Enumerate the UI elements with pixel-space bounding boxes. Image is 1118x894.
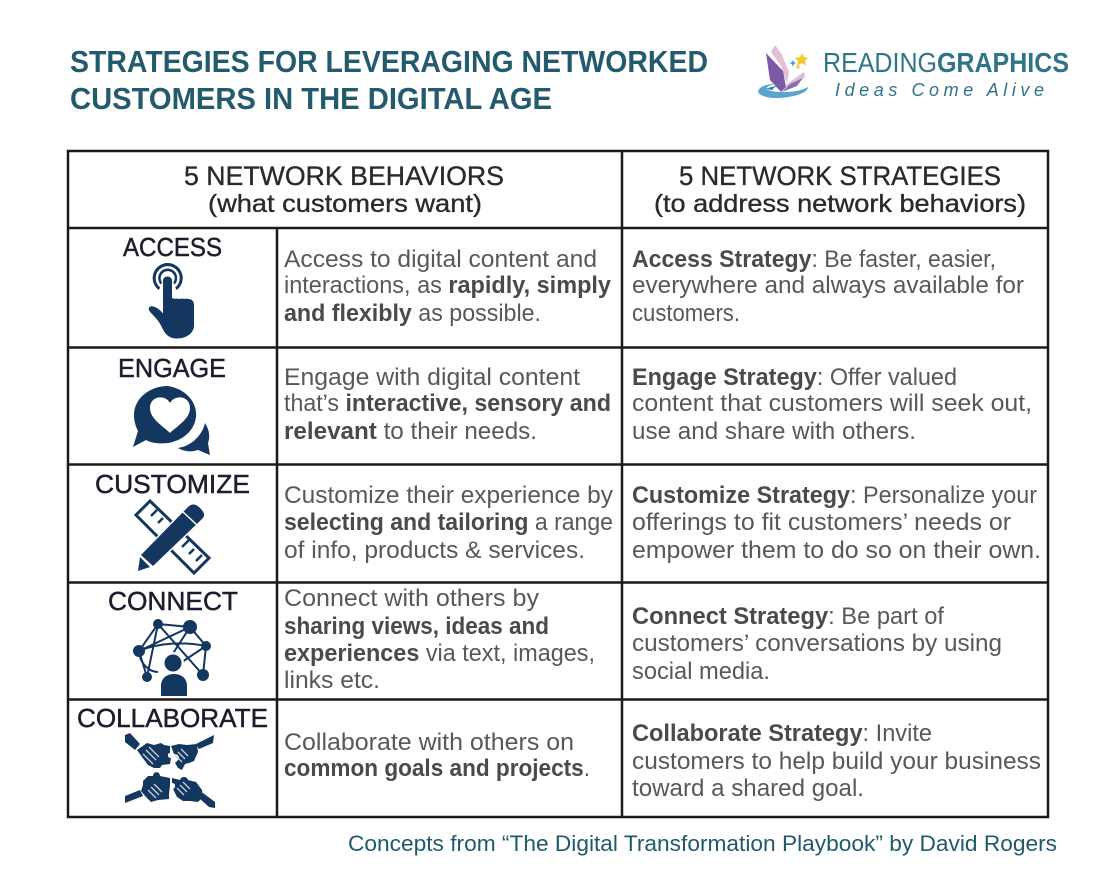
column heading: 5 network strategies: (to address network behaviors) bbox=[654, 190, 1026, 218]
icon: ruler and pencil bbox=[136, 501, 209, 573]
strategy text: offerings to fit customers’ needs or bbox=[632, 509, 1011, 536]
strategy text bbox=[632, 482, 1041, 564]
behavior text: links etc. bbox=[284, 667, 380, 694]
behavior text: selecting and tailoring a range bbox=[284, 509, 613, 536]
behavior text: common goals and projects. bbox=[284, 755, 590, 782]
icon: hands joining puzzle pieces bbox=[125, 733, 215, 808]
title: STRATEGIES FOR LEVERAGING NETWORKED bbox=[70, 44, 708, 79]
table grid bbox=[68, 151, 1048, 817]
title bbox=[70, 44, 708, 116]
strategy text: Access Strategy: Be faster, easier, bbox=[632, 246, 996, 273]
column heading: 5 network behaviors bbox=[184, 161, 504, 218]
strategy text: Connect Strategy: Be part of bbox=[632, 603, 944, 630]
strategy text bbox=[632, 603, 1002, 685]
strategy text: toward a shared goal. bbox=[632, 775, 864, 802]
behavior text bbox=[284, 585, 595, 694]
behavior text: Collaborate with others on bbox=[284, 729, 574, 756]
behavior text bbox=[284, 729, 590, 782]
label: access: ACCESS bbox=[123, 232, 222, 262]
strategy text: Customize Strategy: Personalize your bbox=[632, 482, 1037, 509]
row: collaborate bbox=[77, 703, 1041, 808]
behavior text bbox=[284, 364, 611, 445]
icon: speech bubbles with heart bbox=[133, 386, 210, 455]
behavior text: Customize their experience by bbox=[284, 482, 613, 509]
strategy text: customers’ conversations by using bbox=[632, 630, 1002, 657]
label: collaborate: COLLABORATE bbox=[77, 703, 268, 733]
strategy text: Engage Strategy: Offer valued bbox=[632, 364, 957, 391]
wordmark: READINGGRAPHICS bbox=[823, 47, 1069, 78]
strategy text bbox=[632, 246, 1024, 327]
logo: ReadingGraphics bbox=[758, 45, 1069, 100]
behavior text: interactions, as rapidly, simply bbox=[284, 272, 612, 299]
row: engage bbox=[118, 353, 1032, 455]
strategy text: customers. bbox=[632, 300, 740, 327]
strategy text: customers to help build your business bbox=[632, 748, 1041, 775]
column heading: 5 network behaviors: 5 NETWORK BEHAVIORS bbox=[184, 161, 504, 191]
strategy text: content that customers will seek out, bbox=[632, 390, 1032, 417]
behavior text: relevant to their needs. bbox=[284, 418, 537, 445]
row: customize bbox=[95, 469, 1041, 573]
behavior text: experiences via text, images, bbox=[284, 640, 595, 667]
behavior text: and flexibly as possible. bbox=[284, 300, 541, 327]
strategy text bbox=[632, 720, 1041, 802]
icon: open book with stars bbox=[758, 45, 808, 98]
label: customize: CUSTOMIZE bbox=[95, 469, 250, 499]
behavior text: sharing views, ideas and bbox=[284, 613, 549, 640]
row: access bbox=[123, 232, 1024, 338]
column heading: 5 network behaviors: (what customers want) bbox=[208, 190, 482, 218]
behavior text bbox=[284, 246, 612, 327]
column heading: 5 network strategies bbox=[654, 161, 1026, 218]
behavior text: of info, products & services. bbox=[284, 537, 585, 564]
strategy text: empower them to do so on their own. bbox=[632, 537, 1041, 564]
strategy text: Collaborate Strategy: Invite bbox=[632, 720, 932, 747]
tagline: Ideas Come Alive bbox=[835, 80, 1044, 100]
label: engage: ENGAGE bbox=[118, 353, 226, 383]
title: CUSTOMERS IN THE DIGITAL AGE bbox=[70, 81, 552, 116]
column heading: 5 network strategies: 5 NETWORK STRATEGIES bbox=[679, 161, 1001, 191]
behavior text: Engage with digital content bbox=[284, 364, 580, 391]
row: connect bbox=[108, 585, 1002, 696]
icon: network and person bbox=[133, 619, 211, 696]
behavior text: Connect with others by bbox=[284, 585, 539, 612]
strategy text: use and share with others. bbox=[632, 418, 916, 445]
behavior text: Access to digital content and bbox=[284, 246, 597, 273]
behavior text bbox=[284, 482, 613, 564]
strategy text bbox=[632, 364, 1032, 445]
label: connect: CONNECT bbox=[108, 586, 238, 616]
icon: pointing hand bbox=[149, 263, 194, 338]
source credit: Concepts from “The Digital Transformation Playbook” by David Rogers bbox=[348, 831, 1057, 856]
strategy text: social media. bbox=[632, 658, 770, 685]
behavior text: that’s interactive, sensory and bbox=[284, 390, 611, 417]
strategy text: everywhere and always available for bbox=[632, 272, 1024, 299]
